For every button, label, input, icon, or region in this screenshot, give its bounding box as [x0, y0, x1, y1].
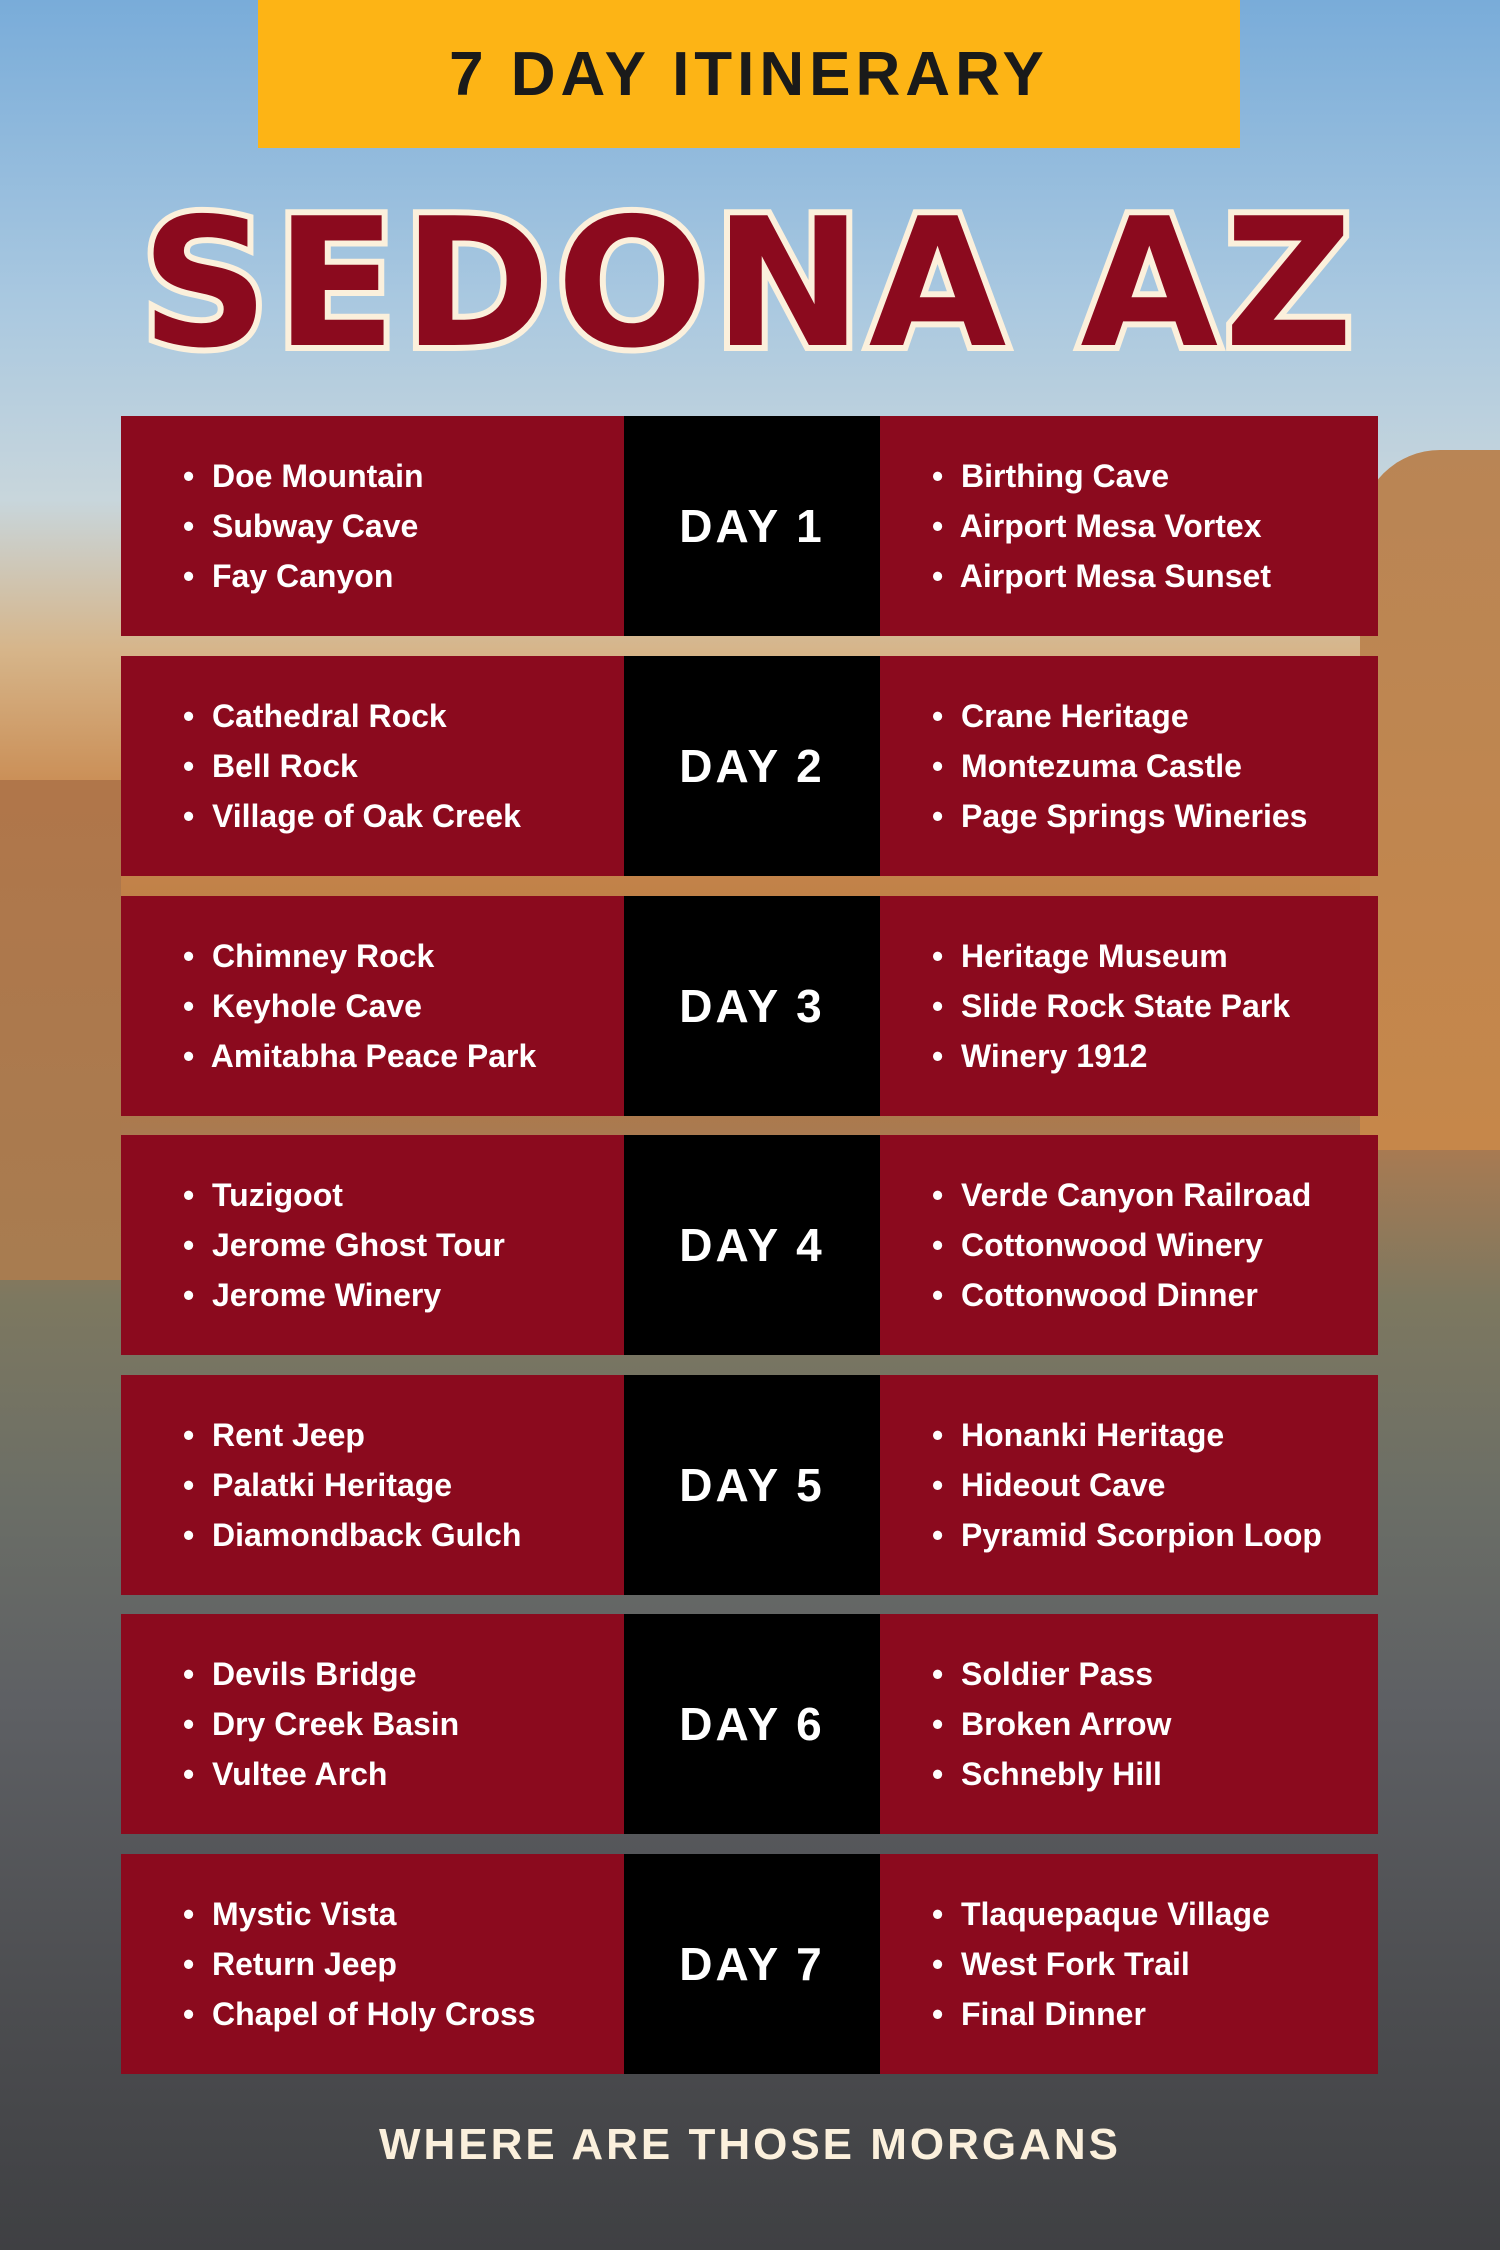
row: day 6	[121, 1614, 1378, 1834]
row: day 6: • Vultee Arch	[183, 1756, 387, 1792]
row: day 1: • Airport Mesa Sunset	[932, 558, 1271, 594]
row: day 6: • Dry Creek Basin	[183, 1706, 459, 1742]
row: day 2	[121, 656, 1378, 876]
row: day 3: • Slide Rock State Park	[932, 988, 1290, 1024]
row: day 5: DAY 5	[679, 1459, 825, 1511]
row: day 7: • Final Dinner	[932, 1996, 1146, 2032]
row: day 1: • Airport Mesa Vortex	[932, 508, 1262, 544]
row: day 2: • Bell Rock	[183, 748, 358, 784]
row: day 6: • Devils Bridge	[183, 1656, 416, 1692]
row: day 7: • Return Jeep	[183, 1946, 397, 1982]
heading: Sedona AZ: SEDONA AZ	[141, 180, 1359, 387]
row: day 1: • Fay Canyon	[183, 558, 393, 594]
row: day 1: DAY 1	[679, 500, 825, 552]
row: day 3: DAY 3	[679, 980, 825, 1032]
row: day 4: • Jerome Winery	[183, 1277, 441, 1313]
row: day 2: • Crane Heritage	[932, 698, 1189, 734]
row: day 3: • Chimney Rock	[183, 938, 434, 974]
row: day 2: • Montezuma Castle	[932, 748, 1242, 784]
row: day 4: • Verde Canyon Railroad	[932, 1177, 1311, 1213]
row: day 6: • Schnebly Hill	[932, 1756, 1162, 1792]
row: day 5: • Rent Jeep	[183, 1417, 365, 1453]
row: day 3: • Keyhole Cave	[183, 988, 422, 1024]
footer: WHERE ARE THOSE MORGANS	[379, 2120, 1121, 2169]
row: day 7: • West Fork Trail	[932, 1946, 1190, 1982]
row: day 7: DAY 7	[679, 1938, 825, 1990]
row: day 1: • Birthing Cave	[932, 458, 1169, 494]
row: day 7: • Chapel of Holy Cross	[183, 1996, 536, 2032]
row: day 4: • Jerome Ghost Tour	[183, 1227, 505, 1263]
row: day 1: • Subway Cave	[183, 508, 418, 544]
row: day 5: • Honanki Heritage	[932, 1417, 1224, 1453]
row: day 2: • Page Springs Wineries	[932, 798, 1307, 834]
row: day 7	[121, 1854, 1378, 2074]
row: day 2: DAY 2	[679, 740, 825, 792]
row: day 5	[121, 1375, 1378, 1595]
row: day 6: • Soldier Pass	[932, 1656, 1153, 1692]
row: day 6: • Broken Arrow	[932, 1706, 1171, 1742]
row: day 4: • Tuzigoot	[183, 1177, 343, 1213]
row: day 3: • Winery 1912	[932, 1038, 1147, 1074]
row: day 2: • Village of Oak Creek	[183, 798, 521, 834]
title banner	[258, 0, 1240, 148]
row: day 3: • Amitabha Peace Park	[183, 1038, 536, 1074]
row: day 4	[121, 1135, 1378, 1355]
row: day 4: DAY 4	[679, 1219, 825, 1271]
row: day 2: • Cathedral Rock	[183, 698, 447, 734]
title banner: 7 DAY ITINERARY	[449, 40, 1049, 108]
row: day 3	[121, 896, 1378, 1116]
row: day 4: • Cottonwood Winery	[932, 1227, 1263, 1263]
row: day 3: • Heritage Museum	[932, 938, 1228, 974]
row: day 5: • Palatki Heritage	[183, 1467, 452, 1503]
row: day 1: • Doe Mountain	[183, 458, 424, 494]
row: day 5: • Pyramid Scorpion Loop	[932, 1517, 1322, 1553]
row: day 6: DAY 6	[679, 1698, 825, 1750]
row: day 7: • Tlaquepaque Village	[932, 1896, 1270, 1932]
row: day 5: • Hideout Cave	[932, 1467, 1165, 1503]
row: day 5: • Diamondback Gulch	[183, 1517, 521, 1553]
row: day 4: • Cottonwood Dinner	[932, 1277, 1258, 1313]
row: day 7: • Mystic Vista	[183, 1896, 396, 1932]
row: day 1	[121, 416, 1378, 636]
